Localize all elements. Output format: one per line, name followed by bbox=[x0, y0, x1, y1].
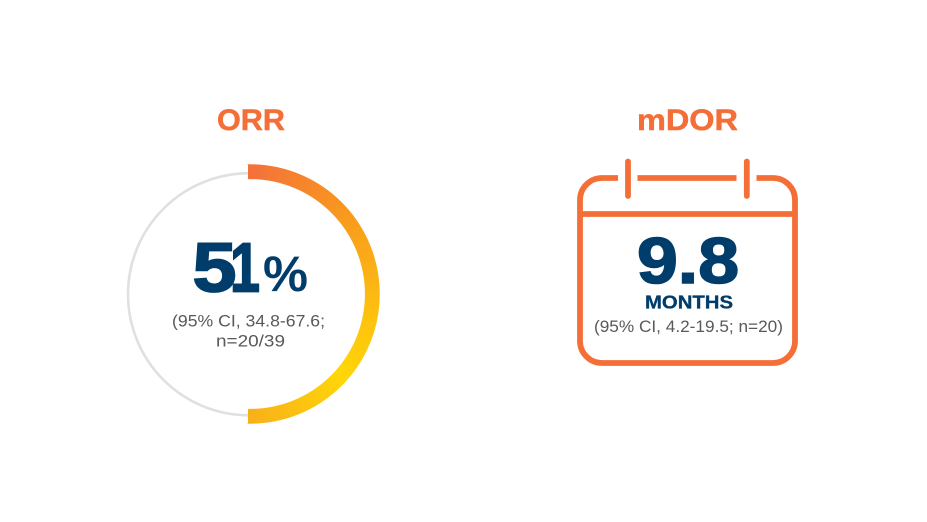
value: 9.8: 9.8 bbox=[637, 224, 739, 297]
value: 51: 5 bbox=[192, 228, 236, 306]
panel: ORR bbox=[126, 104, 380, 424]
value: 51 bbox=[192, 228, 260, 306]
confidence interval line 1: (95% CI, 34.8-67.6; bbox=[172, 312, 325, 330]
heading: ORR: ORR bbox=[217, 104, 285, 137]
heading: mDOR: mDOR bbox=[637, 104, 738, 137]
label: MONTHS: MONTHS bbox=[645, 292, 733, 312]
gradient progress arc: 51% bbox=[248, 164, 380, 424]
value: percent sign: % bbox=[263, 246, 308, 302]
ORR text bbox=[172, 104, 325, 350]
confidence interval line 2: n=20/39 bbox=[216, 332, 285, 350]
gray ring track bbox=[126, 172, 248, 416]
panel: mDOR bbox=[577, 104, 798, 366]
icon: calendar bbox=[580, 162, 795, 363]
value: 51: 1 bbox=[230, 228, 260, 306]
confidence interval: (95% CI, 4.2-19.5; n=20) bbox=[594, 317, 783, 336]
